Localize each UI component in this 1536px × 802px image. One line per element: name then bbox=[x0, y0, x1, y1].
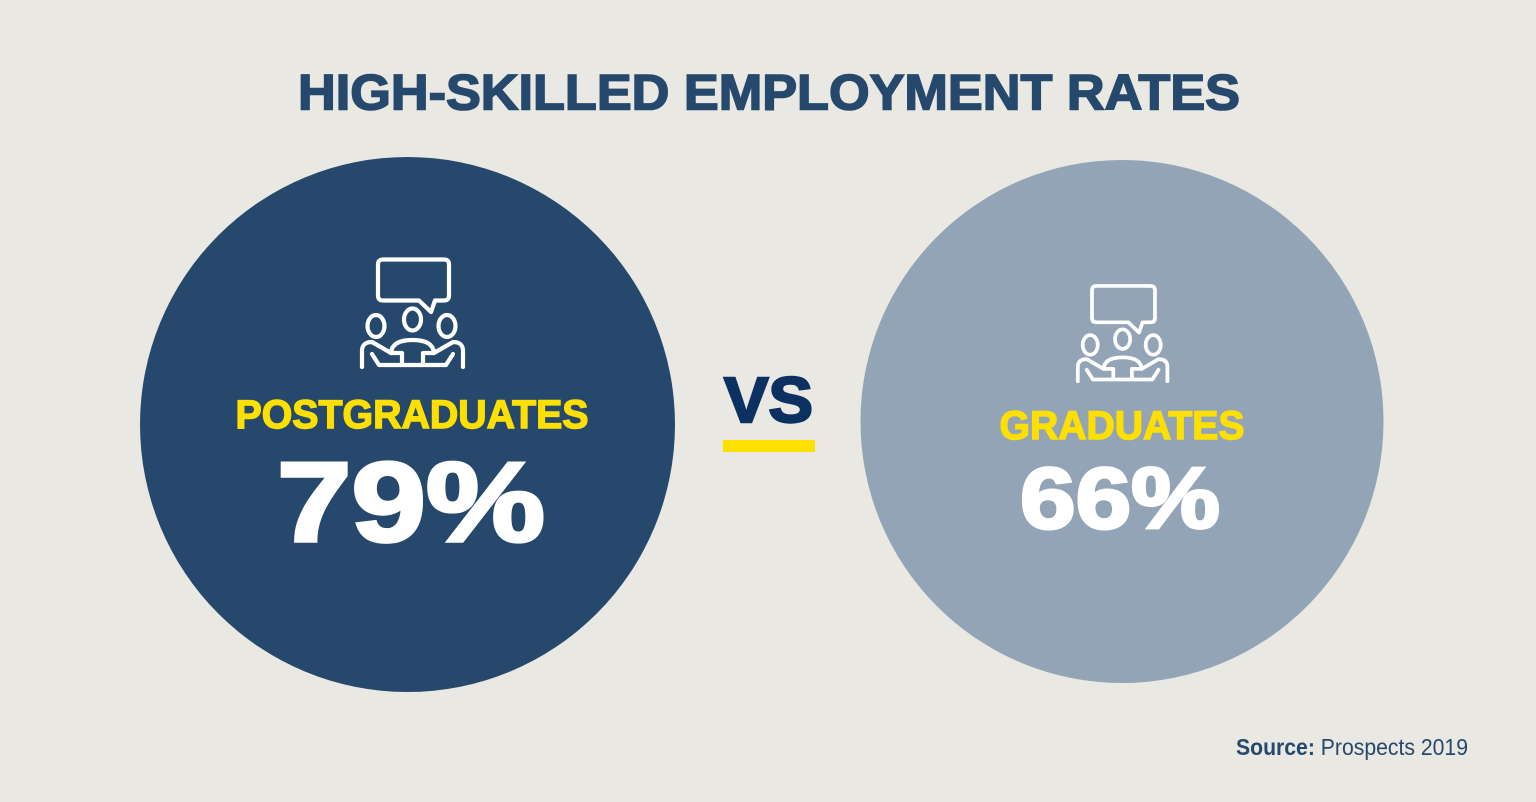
panel: postgraduates bbox=[140, 157, 675, 692]
underline bbox=[723, 440, 815, 452]
circle: graduates bbox=[860, 160, 1384, 683]
panel: graduates bbox=[860, 160, 1384, 683]
value: 66%: 66% bbox=[1020, 451, 1220, 547]
label: graduates: GRADUATES bbox=[1000, 404, 1244, 448]
versus label bbox=[723, 364, 815, 452]
circle: postgraduates bbox=[140, 157, 675, 692]
icon: meeting with speech bubble bbox=[362, 260, 463, 367]
text: VS: VS bbox=[724, 364, 813, 436]
value: 79%: 79% bbox=[277, 439, 545, 565]
title: HIGH-SKILLED EMPLOYMENT RATES bbox=[298, 64, 1240, 120]
icon: meeting with speech bubble bbox=[1078, 286, 1167, 381]
label: postgraduates: POSTGRADUATES bbox=[236, 393, 588, 437]
source note: Source: Prospects 2019 bbox=[1236, 734, 1468, 760]
